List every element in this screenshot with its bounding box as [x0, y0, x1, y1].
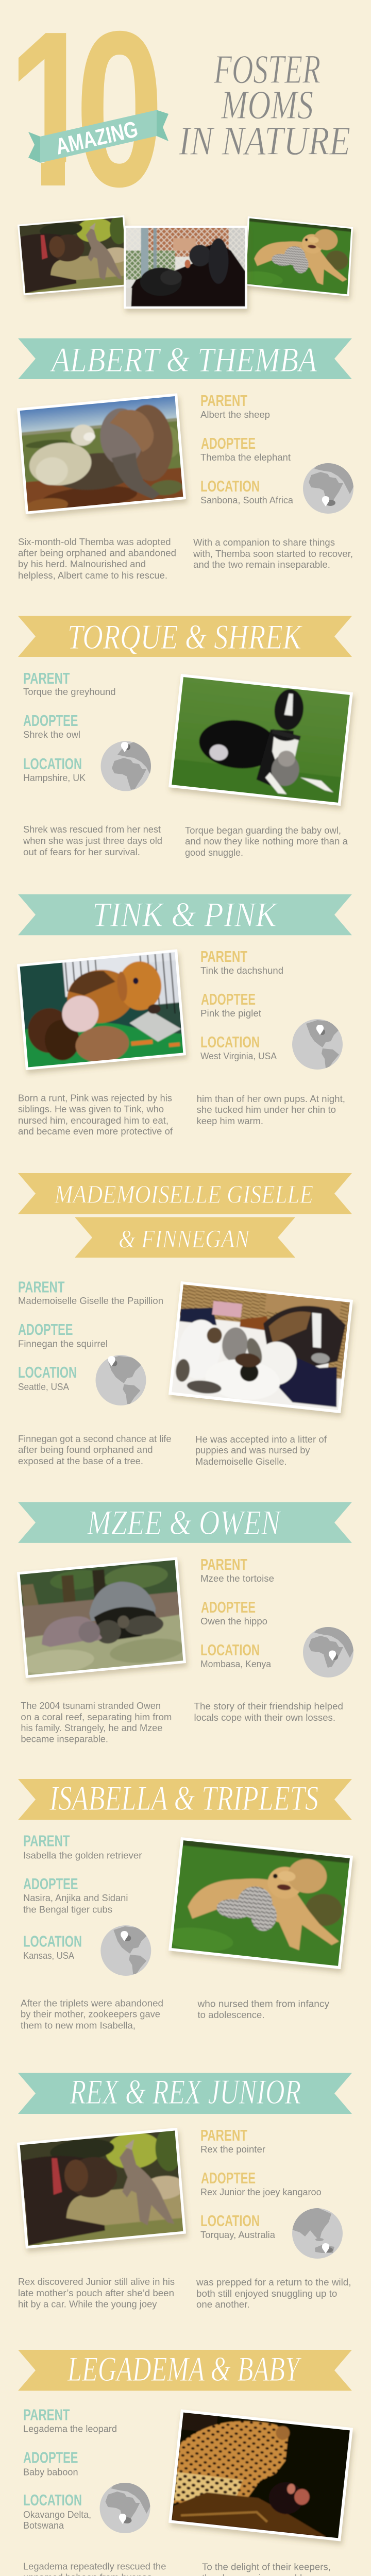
globe: West Virginia: [292, 1019, 343, 1070]
globe: Kansas: [100, 1925, 151, 1976]
story text right: both still enjoyed snuggling up to: [196, 2289, 337, 2299]
photo: [12, 1557, 186, 1679]
facts: Baby baboon: [23, 2467, 78, 2478]
story text left: [21, 1998, 163, 2031]
banner: ALBERT & THEMBA: [50, 340, 317, 379]
facts: [200, 1555, 274, 1669]
facts: Albert the sheep: [200, 410, 270, 420]
facts: PARENT: [200, 392, 247, 410]
story text right: [193, 537, 353, 570]
ribbon: amazing: AMAZING: [53, 116, 140, 160]
story text left: [18, 2277, 175, 2310]
facts: ADOPTEE: [23, 1875, 78, 1893]
banner: MZEE & OWEN: [87, 1503, 282, 1542]
facts: PARENT: [200, 947, 247, 965]
story text left: nursed him, encouraged him to eat,: [18, 1115, 168, 1126]
photo: [168, 674, 353, 806]
story text left: Legadema repeatedly rescued the: [23, 2562, 166, 2572]
story text right: [196, 2277, 351, 2310]
facts: LOCATION: [23, 755, 82, 773]
facts: Rex the pointer: [200, 2144, 265, 2155]
facts: Shrek the owl: [23, 730, 80, 740]
facts: Mademoiselle Giselle the Papillion: [18, 1296, 163, 1306]
banner: TINK & PINK: [92, 895, 278, 934]
facts: Botswana: [23, 2520, 64, 2531]
banner line two: & FINNEGAN: [119, 1224, 250, 1253]
story text right: and now they like nothing more than a: [185, 836, 348, 846]
facts: Sanbona, South Africa: [200, 495, 294, 505]
story text left: [21, 1701, 172, 1744]
photo: dog and kangaroo: [18, 215, 132, 295]
story text right: [194, 1701, 343, 1723]
facts: Rex Junior the joey kangaroo: [200, 2187, 322, 2197]
story text left: hit by a car. While the young joey: [18, 2299, 157, 2310]
story text right: him than of her own pups. At night,: [197, 1094, 345, 1104]
facts: ADOPTEE: [201, 434, 256, 452]
story text right: [197, 1999, 329, 2020]
section: Tink and Pink: [17, 894, 352, 1137]
facts: Okavango Delta,: [23, 2510, 91, 2520]
photo: [163, 1837, 353, 1969]
story text left: Shrek was rescued from her nest: [23, 824, 161, 835]
facts: LOCATION: [200, 2212, 260, 2230]
photo: [17, 393, 186, 515]
section: Mademoiselle Giselle and Finnegan: [18, 1173, 353, 1467]
globe: Okavango Delta: [100, 2483, 150, 2533]
story text right: locals cope with their own losses.: [194, 1713, 335, 1723]
story text left: by their mother, zookeepers gave: [21, 2009, 160, 2020]
facts: [200, 947, 283, 1061]
story text left: after being found orphaned and: [18, 1445, 153, 1455]
facts: Owen the hippo: [200, 1616, 267, 1626]
story text left: on a coral reef, separating him from: [21, 1712, 172, 1722]
facts: Torquay, Australia: [200, 2230, 276, 2240]
story text right: To the delight of their keepers,: [202, 2562, 331, 2572]
section: Torque and Shrek: [18, 616, 353, 858]
facts: LOCATION: [200, 477, 260, 495]
globe: Torquay: [291, 2208, 343, 2259]
facts: the Bengal tiger cubs: [23, 1904, 112, 1914]
story text left: out of fears for her survival.: [23, 847, 140, 857]
facts: ADOPTEE: [201, 2169, 256, 2187]
story text right: keep him warm.: [197, 1116, 263, 1126]
story text right: The story of their friendship helped: [194, 1701, 343, 1711]
story text left: [23, 2562, 166, 2576]
photo: gorilla and kitten: [124, 226, 247, 309]
facts: LOCATION: [23, 2491, 82, 2509]
facts: Themba the elephant: [200, 452, 291, 463]
story text left: siblings. He was given to Tink, who: [18, 1104, 164, 1114]
story text left: Finnegan got a second chance at life: [18, 1434, 171, 1444]
story text left: [18, 1434, 171, 1466]
story text left: [18, 1093, 173, 1137]
facts: LOCATION: [23, 1933, 82, 1951]
globe: Seattle: [96, 1355, 146, 1405]
facts: ADOPTEE: [201, 990, 256, 1008]
facts: PARENT: [23, 2406, 70, 2424]
banner line one: MADEMOISELLE GISELLE: [54, 1180, 313, 1209]
facts: Kansas, USA: [23, 1951, 74, 1961]
story text right: [195, 1434, 327, 1467]
facts: PARENT: [200, 1555, 247, 1573]
story text right: one another.: [196, 2299, 249, 2310]
story text left: after being orphaned and abandoned: [18, 548, 176, 558]
facts: PARENT: [18, 1278, 64, 1296]
story text left: by his herd. Malnourished and: [18, 559, 146, 569]
facts: LOCATION: [18, 1363, 77, 1381]
banner: REX & REX JUNIOR: [70, 2072, 301, 2111]
facts: Isabella the golden retriever: [23, 1851, 142, 1861]
photo: [17, 2127, 189, 2248]
banner: LEGADEMA & BABY: [67, 2349, 302, 2388]
story text right: who nursed them from infancy: [197, 1999, 329, 2009]
globe: Hampshire: [101, 741, 151, 791]
facts: LOCATION: [200, 1641, 260, 1659]
story text right: Mademoiselle Giselle.: [195, 1456, 286, 1467]
story text left: Rex discovered Junior still alive in his: [18, 2277, 175, 2287]
facts: Mombasa, Kenya: [200, 1659, 272, 1669]
facts: ADOPTEE: [23, 2448, 78, 2467]
story text left: The 2004 tsunami stranded Owen: [21, 1701, 161, 1711]
banner line one: [18, 1173, 352, 1214]
facts: ADOPTEE: [201, 1598, 256, 1616]
story text right: was prepped for a return to the wild,: [196, 2277, 351, 2287]
facts: Tink the dachshund: [200, 965, 283, 976]
facts: Finnegan the squirrel: [18, 1339, 108, 1349]
section: Legadema and baby: [18, 2349, 353, 2576]
facts: Torque the greyhound: [23, 687, 115, 697]
title: foster moms in nature: MOMS: [221, 83, 313, 128]
story text left: exposed at the base of a tree.: [18, 1456, 143, 1466]
photo: [168, 1281, 353, 1413]
facts: [23, 2406, 117, 2531]
story text right: [185, 825, 348, 858]
title: foster moms in nature: [178, 47, 350, 164]
story text left: late mother’s pouch after she’d been: [18, 2288, 174, 2298]
facts: West Virginia, USA: [200, 1051, 277, 1061]
story text left: Born a runt, Pink was rejected by his: [18, 1093, 172, 1104]
facts: PARENT: [23, 669, 70, 687]
facts: Legadema the leopard: [23, 2424, 117, 2434]
story text right: and the two remain inseparable.: [193, 560, 330, 570]
facts: [18, 1278, 163, 1392]
photo: golden retriever and tiger cubs: [240, 216, 353, 296]
facts: Hampshire, UK: [23, 773, 86, 783]
facts: ADOPTEE: [23, 711, 78, 730]
facts: LOCATION: [200, 1033, 260, 1051]
facts: PARENT: [200, 2126, 247, 2144]
facts: Nasira, Anjika and Sidani: [23, 1893, 128, 1903]
story text left: helpless, Albert came to his rescue.: [18, 570, 167, 581]
story text left: After the triplets were abandoned: [21, 1998, 163, 2008]
story text right: to adolescence.: [198, 2010, 265, 2020]
photo: [17, 949, 186, 1070]
banner: [18, 1502, 352, 1543]
header: [8, 0, 353, 309]
facts: Seattle, USA: [18, 1382, 69, 1392]
facts: [200, 2126, 322, 2240]
story text right: with, Themba soon started to recover,: [193, 549, 353, 559]
section: Albert and Themba: [17, 338, 371, 581]
story text left: them to new mom Isabella,: [21, 2021, 136, 2031]
story text right: she tucked him under her chin to: [197, 1105, 336, 1115]
story text left: Six-month-old Themba was adopted: [18, 537, 171, 547]
globe: Mombasa: [303, 1627, 353, 1677]
title: foster moms in nature: FOSTER: [213, 47, 321, 92]
story text right: With a companion to share things: [193, 537, 335, 548]
banner: TORQUE & SHREK: [68, 617, 303, 656]
story text left: [23, 824, 162, 857]
photo: [168, 2409, 353, 2541]
facts: PARENT: [23, 1832, 70, 1850]
story text right: puppies and was nursed by: [195, 1445, 310, 1455]
banner: [18, 894, 352, 935]
story text left: when she was just three days old: [23, 836, 162, 846]
facts: [200, 392, 294, 505]
story text left: became inseparable.: [21, 1734, 108, 1744]
story text right: He was accepted into a litter of: [195, 1434, 327, 1445]
section: Mzee and Owen: [12, 1502, 371, 1744]
facts: [23, 1832, 142, 1961]
story text left: his family. Strangely, he and Mzee: [21, 1723, 162, 1733]
banner line two: [75, 1217, 295, 1258]
section: Isabella and triplets: [18, 1778, 353, 2031]
facts: Mzee the tortoise: [200, 1573, 274, 1584]
section: Rex and Rex Junior: [17, 2072, 352, 2310]
globe: South Africa: [303, 463, 353, 514]
story text left: and became even more protective of: [18, 1126, 173, 1137]
story text right: [197, 1094, 345, 1126]
facts: Pink the piglet: [200, 1008, 261, 1019]
facts: [23, 669, 115, 783]
big number 10: [19, 31, 158, 188]
story text left: [18, 537, 176, 581]
facts: ADOPTEE: [18, 1320, 73, 1338]
story text right: good snuggle.: [185, 848, 243, 858]
story text right: Torque began guarding the baby owl,: [185, 825, 341, 836]
